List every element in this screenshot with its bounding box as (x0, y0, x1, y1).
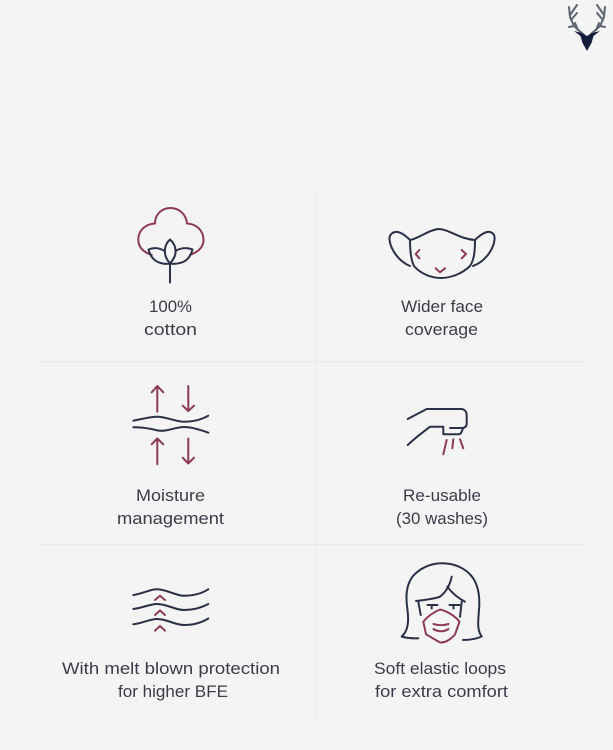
icon: face mask (389, 229, 495, 278)
panel: melt blown protection (62, 589, 280, 701)
icon: woman wearing mask (402, 563, 482, 642)
panel: re-usable (396, 409, 488, 528)
icon: deer logo (569, 5, 605, 51)
label: wider face coverage (401, 298, 483, 339)
label: melt blown protection: for higher BFE (118, 683, 228, 701)
label: moisture management: Moisture (136, 487, 205, 505)
icon: moisture arrows and fabric (133, 386, 208, 464)
panel: 100% cotton (138, 208, 204, 339)
label: wider face coverage: coverage (405, 321, 478, 339)
label: re-usable 30 washes (396, 487, 488, 528)
panel: wider face coverage (389, 229, 495, 339)
label: wider face coverage: Wider face (401, 298, 483, 316)
label: moisture management: management (117, 510, 224, 528)
label: re-usable 30 washes: (30 washes) (396, 510, 488, 528)
label: soft elastic loops: for extra comfort (375, 683, 508, 701)
label: soft elastic loops: Soft elastic loops (374, 660, 506, 678)
icon: layered waves (133, 589, 208, 631)
icon: cotton flower (138, 208, 204, 282)
label: re-usable 30 washes: Re-usable (403, 487, 481, 505)
icon: running tap (408, 409, 467, 454)
panel: moisture management (117, 386, 224, 528)
label: 100% cotton: 100% (149, 298, 192, 316)
label: melt blown protection (62, 660, 280, 701)
label: soft elastic loops (374, 660, 508, 701)
panel: soft elastic loops (374, 563, 508, 701)
label: 100% cotton: cotton (144, 321, 197, 339)
label: moisture management (117, 487, 224, 528)
label: 100% cotton (144, 298, 197, 339)
label: melt blown protection: With melt blown protection (62, 660, 280, 678)
